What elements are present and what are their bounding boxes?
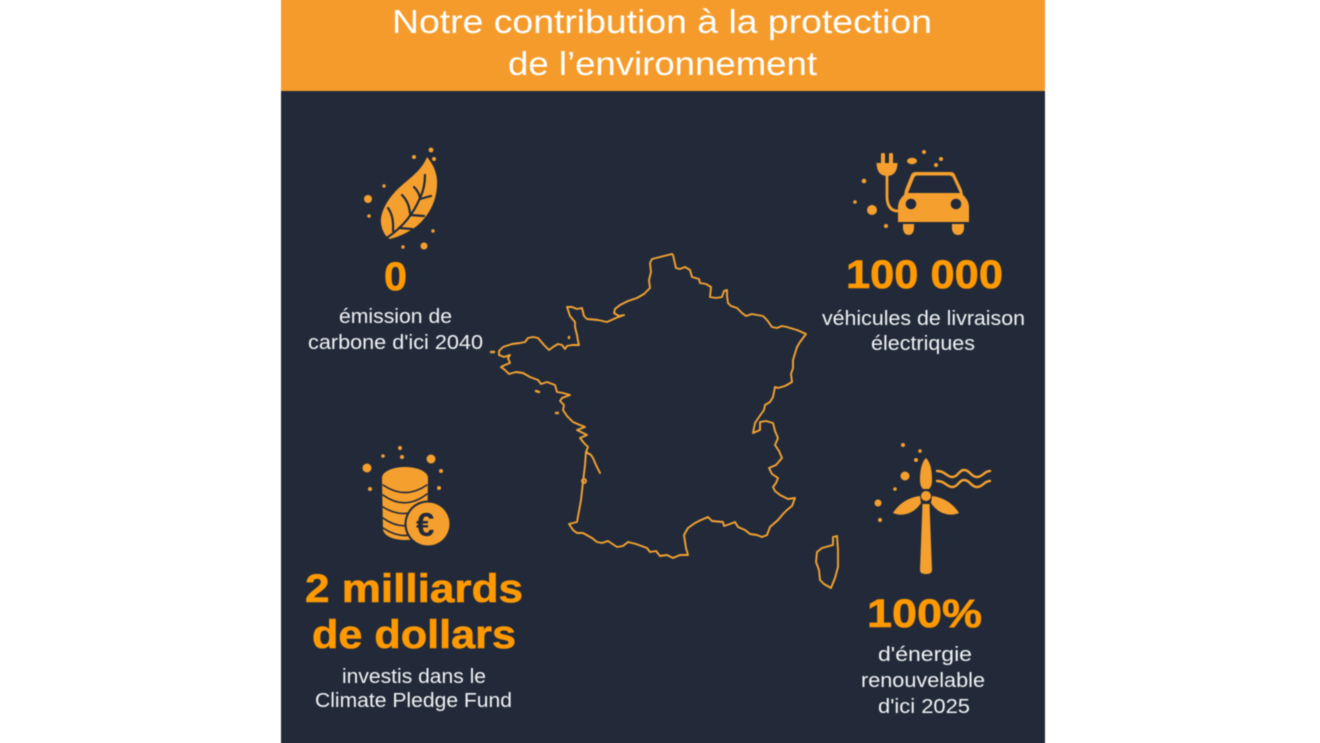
icon: electric car xyxy=(853,150,969,235)
stat: zero carbon xyxy=(308,255,483,354)
map of France xyxy=(491,254,838,588)
Corsica xyxy=(816,536,838,588)
stat: zero carbon: 0 xyxy=(384,255,407,299)
stat: zero carbon: émission de xyxy=(339,306,452,328)
title: de l’environnement xyxy=(508,45,817,82)
stat: renewable energy: 100% xyxy=(867,592,982,636)
icon: euro coins xyxy=(362,446,452,548)
stat: renewable energy: d'ici 2025 xyxy=(878,696,970,718)
stat: renewable energy: renouvelable xyxy=(861,670,985,692)
coastal islands xyxy=(491,337,569,413)
stat: delivery vehicles: électriques xyxy=(871,333,975,355)
icon: wind turbine xyxy=(874,443,990,574)
header band xyxy=(281,0,1045,91)
icon: leaf xyxy=(364,148,437,250)
stat: climate fund: Climate Pledge Fund xyxy=(315,690,512,712)
stat: climate fund xyxy=(305,567,523,712)
stat: climate fund: 2 milliards xyxy=(305,567,523,611)
stat: delivery vehicles: 100 000 xyxy=(846,253,1003,297)
stat: renewable energy: d'énergie xyxy=(878,644,972,666)
stat: climate fund: investis dans le xyxy=(342,666,486,688)
stat: climate fund: de dollars xyxy=(312,613,516,657)
stat: delivery vehicles xyxy=(822,253,1025,355)
stat: renewable energy xyxy=(861,592,985,718)
stat: zero carbon: carbone d'ici 2040 xyxy=(308,332,483,354)
euro sign: € xyxy=(416,506,434,543)
stat: delivery vehicles: véhicules de livraison xyxy=(822,308,1025,330)
title: Notre contribution à la protection xyxy=(392,3,932,40)
panel: dark background xyxy=(281,0,1045,743)
title xyxy=(392,3,932,82)
